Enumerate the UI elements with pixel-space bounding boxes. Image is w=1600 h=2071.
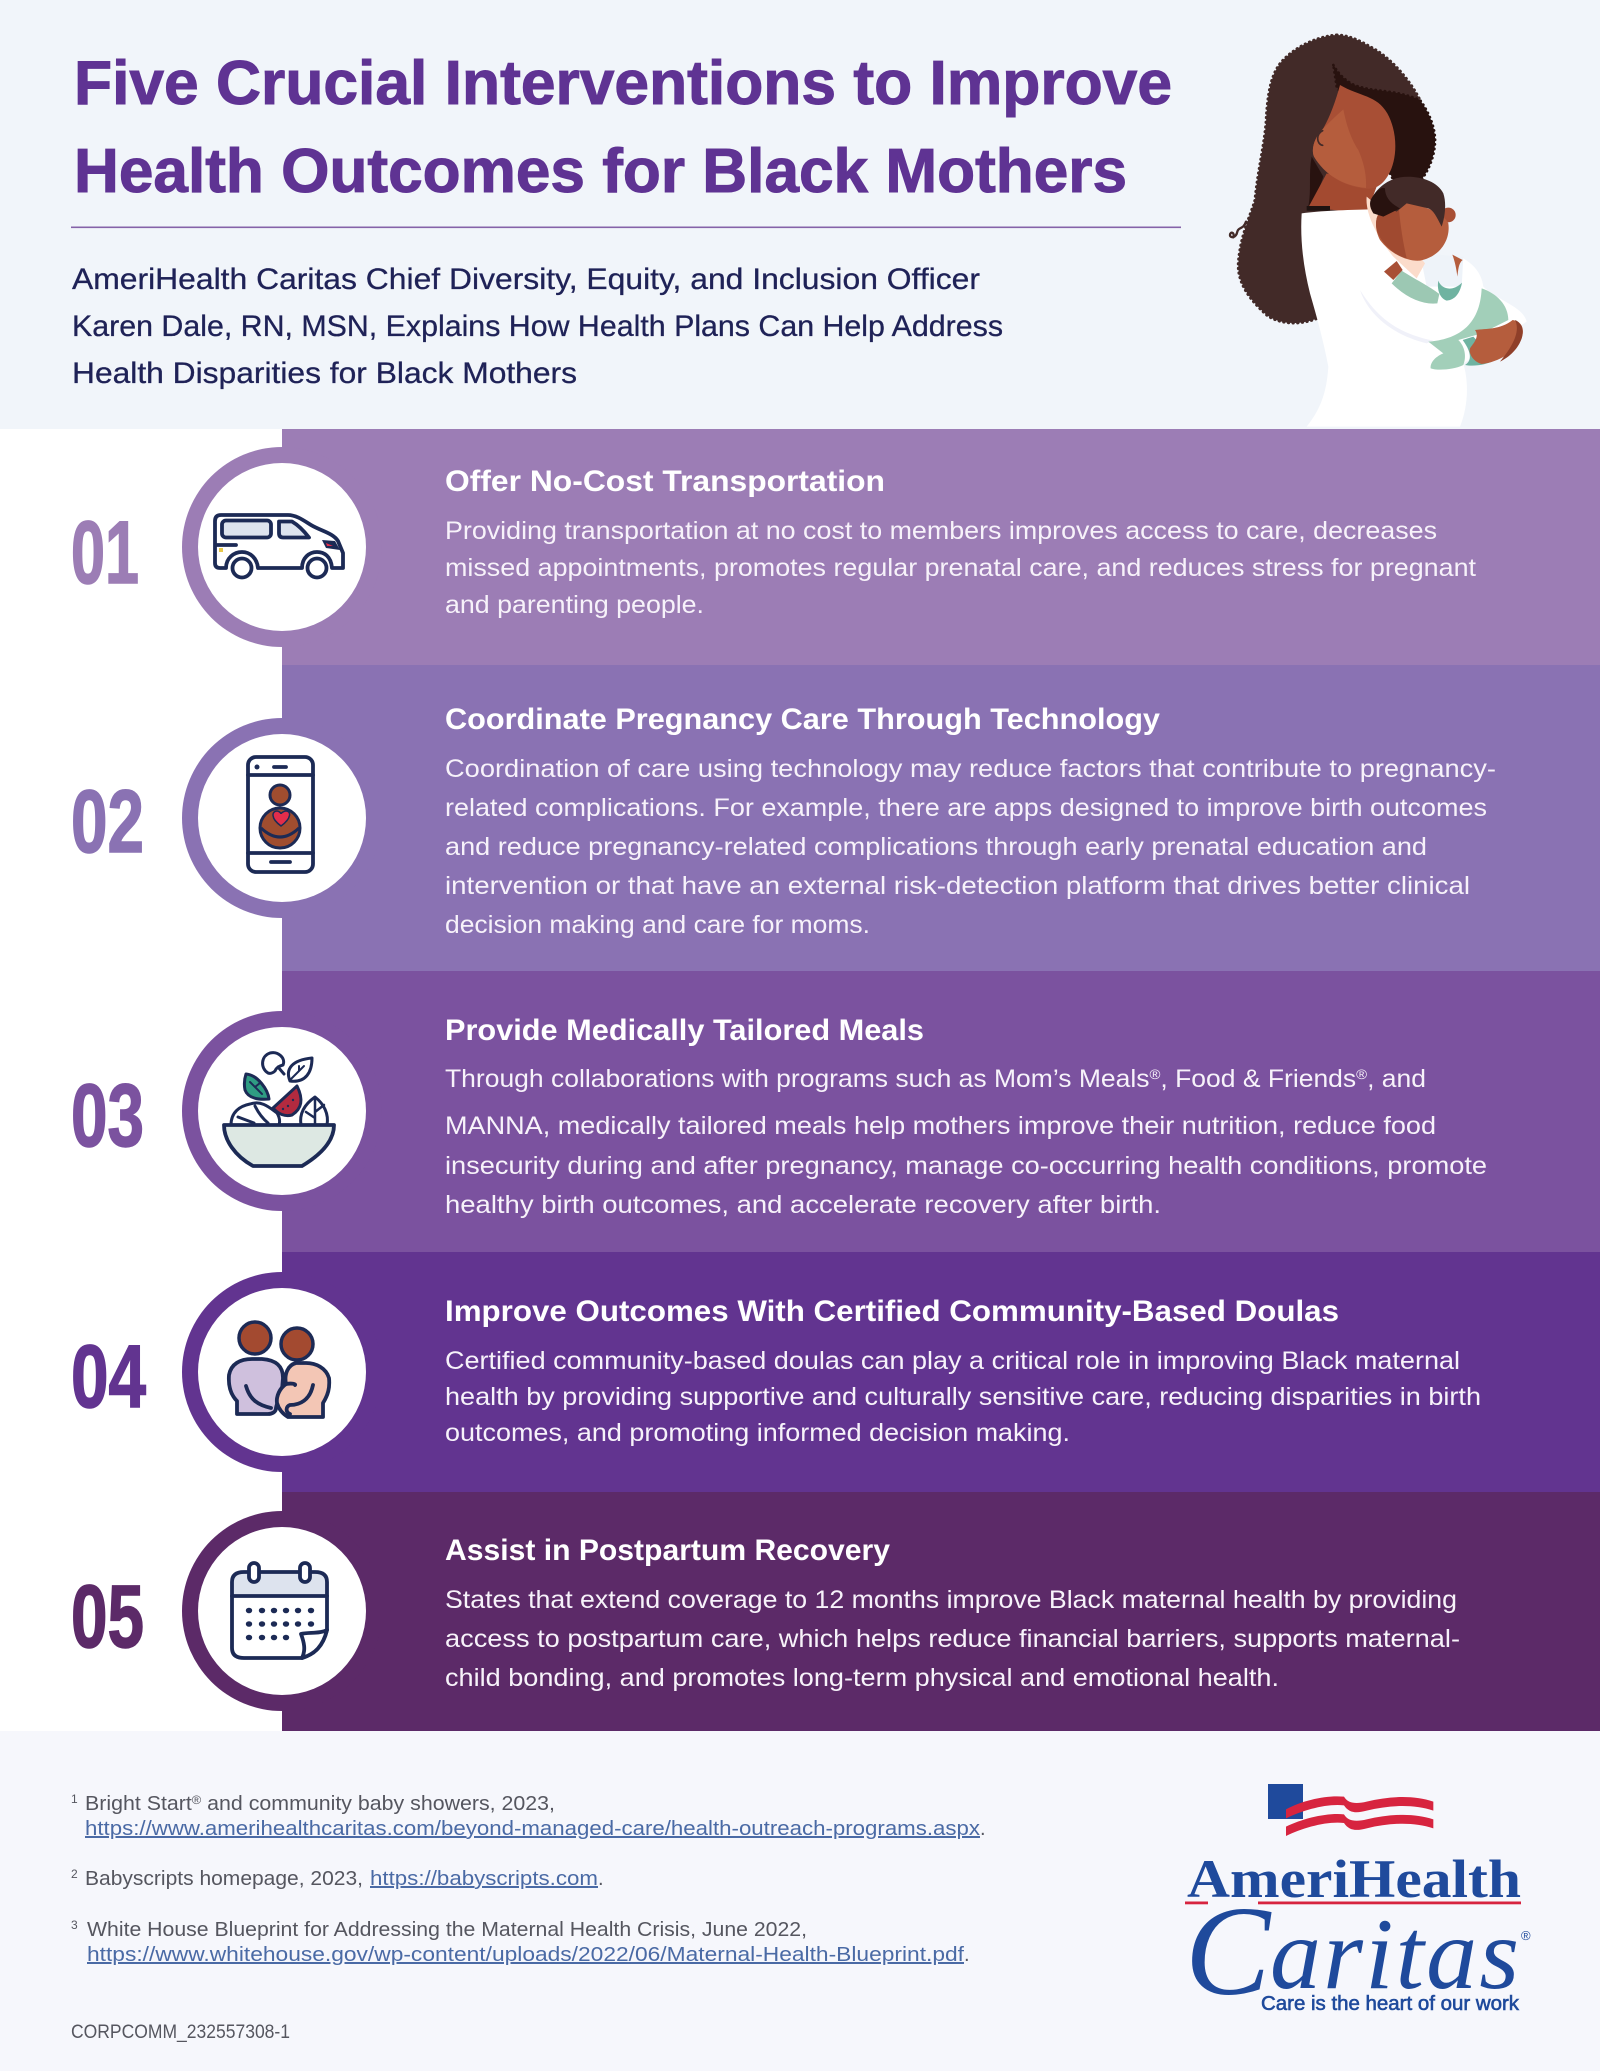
body text: Coordination of care using technology may reduce factors that contribute to pregnancy- (445, 755, 1496, 783)
panel: 04 doulas (71, 1252, 1600, 1492)
body text: and reduce pregnancy-related complications through early prenatal education and (445, 833, 1427, 861)
illustration: mother holding baby (1230, 35, 1527, 427)
logo: AmeriHealth Caritas: C (1185, 1880, 1272, 2022)
logo: AmeriHealth Caritas (1185, 1784, 1531, 2022)
subtitle: AmeriHealth Caritas Chief Diversity, Equity, and Inclusion Officer (72, 263, 980, 296)
body text (445, 755, 1496, 939)
heading: Coordinate Pregnancy Care Through Technology (445, 703, 1160, 736)
body text: intervention or that have an external risk-detection platform that drives better clinical (445, 872, 1470, 900)
icon: van (215, 515, 343, 578)
footnotes: Bright Start (85, 1793, 185, 1815)
heading: Offer No-Cost Transportation (445, 465, 885, 498)
body text: States that extend coverage to 12 months improve Black maternal health by providing (445, 1586, 1457, 1614)
number 05: 05 (71, 1566, 144, 1666)
title: Health Outcomes for Black Mothers (74, 137, 1127, 206)
footnotes: https://www.amerihealthcaritas.com/beyond-managed-care/health-outreach-programs.aspx (85, 1818, 980, 1840)
panel: 05 postpartum (71, 1492, 1600, 1731)
subtitle (72, 263, 1003, 390)
title (74, 49, 1172, 206)
heading: Provide Medically Tailored Meals (445, 1014, 924, 1047)
heading: Assist in Postpartum Recovery (445, 1534, 890, 1567)
body text: access to postpartum care, which helps reduce financial barriers, supports maternal- (445, 1625, 1460, 1653)
logo: AmeriHealth Caritas: ® (1521, 1928, 1531, 1943)
number 03: 03 (71, 1065, 144, 1165)
subtitle: Karen Dale, RN, MSN, Explains How Health Plans Can Help Address (72, 310, 1003, 343)
footnotes: Babyscripts homepage, 2023, (85, 1868, 363, 1890)
footnotes: https://www.whitehouse.gov/wp-content/uploads/2022/06/Maternal-Health-Blueprint.pdf (87, 1944, 965, 1966)
body text: Through collaborations with programs such as Mom’s Meals (445, 1065, 1110, 1093)
body text (445, 1347, 1481, 1447)
number 04: 04 (71, 1326, 146, 1426)
body text: outcomes, and promoting informed decision making. (445, 1419, 1070, 1447)
icon: salad bowl (224, 1053, 334, 1166)
subtitle: Health Disparities for Black Mothers (72, 357, 577, 390)
footnotes: and community baby showers, 2023, (201, 1793, 555, 1815)
body text: Certified community-based doulas can play a critical role in improving Black maternal (445, 1347, 1460, 1375)
body text: insecurity during and after pregnancy, manage co-occurring health conditions, promote (445, 1152, 1487, 1180)
footnotes: . (980, 1818, 986, 1840)
document code: CORPCOMM_232557308-1 (71, 2022, 290, 2043)
footnotes: https://babyscripts.com (370, 1868, 598, 1890)
body text: missed appointments, promotes regular prenatal care, and reduces stress for pregnant (445, 554, 1476, 582)
body text: MANNA, medically tailored meals help mothers improve their nutrition, reduce food (445, 1112, 1436, 1140)
footnotes: ® (192, 1793, 201, 1807)
body text: Providing transportation at no cost to members improves access to care, decreases (445, 517, 1437, 545)
number 02: 02 (71, 771, 144, 871)
body text: child bonding, and promotes long-term physical and emotional health. (445, 1664, 1279, 1692)
body text: decision making and care for moms. (445, 911, 870, 939)
heading: Improve Outcomes With Certified Community-Based Doulas (445, 1295, 1339, 1328)
number 01: 01 (71, 502, 139, 602)
logo: AmeriHealth Caritas: aritas (1270, 1898, 1521, 2011)
body text: , and (1367, 1065, 1426, 1093)
body text: and parenting people. (445, 591, 704, 619)
footnotes: . (964, 1944, 970, 1966)
body text: related complications. For example, there are apps designed to improve birth outcomes (445, 794, 1487, 822)
panel: 02 technology (71, 665, 1600, 971)
footnotes: White House Blueprint for Addressing the Maternal Health Crisis, June 2022, (87, 1919, 807, 1941)
body text: healthy birth outcomes, and accelerate recovery after birth. (445, 1191, 1161, 1219)
icon: calendar (232, 1563, 327, 1658)
logo: AmeriHealth Caritas: Care is the heart of our work (1261, 1993, 1520, 2015)
footnotes: . (598, 1868, 604, 1890)
logo: AmeriHealth Caritas: AmeriHealth (1187, 1849, 1521, 1909)
body text: ® (1149, 1066, 1161, 1082)
title: Five Crucial Interventions to Improve (74, 49, 1172, 118)
body text: health by providing supportive and culturally sensitive care, reducing disparities in birth (445, 1383, 1481, 1411)
footnotes: 1 (71, 1792, 78, 1806)
footnotes (71, 1792, 986, 1966)
panel: 01 transportation (71, 429, 1600, 665)
icon: doula and mother (229, 1322, 329, 1417)
icon: phone with pregnant person (248, 757, 313, 872)
panel: 03 meals (71, 971, 1600, 1252)
body text (445, 1065, 1487, 1219)
footnotes: 2 (71, 1867, 78, 1881)
body text: ® (1356, 1066, 1368, 1082)
footnotes: 3 (71, 1918, 78, 1932)
body text (445, 517, 1476, 619)
body text: , Food & Friends (1160, 1065, 1356, 1093)
body text (445, 1586, 1460, 1692)
